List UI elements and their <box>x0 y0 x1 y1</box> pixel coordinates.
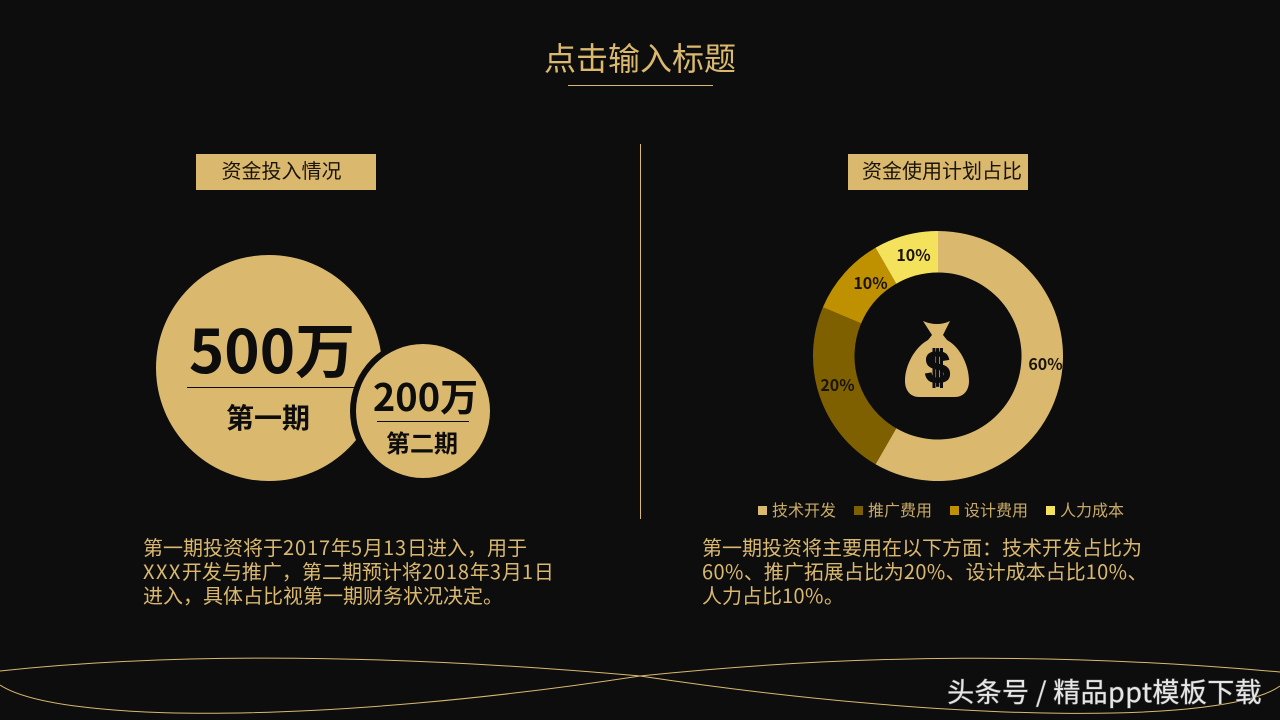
data labels: 20% <box>820 372 855 396</box>
text block: funding description: 进入，具体占比视第一期财务状况决定。 <box>143 580 503 609</box>
text block: usage description: 60%、推广拓展占比为20%、设计成本占比10%、 <box>702 556 1147 585</box>
segment: 10% labour <box>876 231 938 284</box>
centre divider <box>640 144 641 519</box>
chart legend: 设计费用 <box>964 497 1028 521</box>
circle: phase one: 500万 <box>189 304 355 391</box>
icon: money bag: $ <box>925 341 950 393</box>
text block: funding description: 第一期投资将于2017年5月13日进入，用于 <box>143 532 527 561</box>
data labels: 60% <box>1028 351 1063 375</box>
chart legend: 人力成本 <box>1060 497 1124 521</box>
heading: funding input <box>196 154 376 190</box>
circle: phase two: 第二期 <box>386 424 458 459</box>
icon: money bag <box>905 321 969 397</box>
heading: funding use: 资金使用计划占比 <box>862 155 1022 184</box>
circle: phase one <box>156 255 382 481</box>
chart legend: 技术开发 <box>772 497 836 521</box>
text block: usage description <box>702 532 1147 609</box>
donut chart <box>813 231 1063 481</box>
text block: usage description: 第一期投资将主要用在以下方面：技术开发占比为 <box>702 532 1142 561</box>
decorative curves <box>0 658 1280 713</box>
segment: 10% design <box>823 248 896 323</box>
segment: 20% promotion <box>813 307 896 464</box>
data labels: 10% <box>896 242 931 266</box>
text block: usage description: 人力占比10%。 <box>702 580 844 609</box>
data labels <box>820 242 1063 396</box>
chart legend <box>758 497 1124 521</box>
circle: phase two: 200万 <box>373 367 478 422</box>
heading: funding input: 资金投入情况 <box>222 155 342 184</box>
text block: funding description: XXX开发与推广，第二期预计将2018年3月1日 <box>143 556 554 585</box>
text block: funding description <box>143 532 554 609</box>
circle: phase one: 第一期 <box>226 397 310 437</box>
circle: phase two <box>350 338 496 484</box>
data labels: 10% <box>853 270 888 294</box>
chart legend: 推广费用 <box>868 497 932 521</box>
segment: 60% technology <box>876 231 1063 481</box>
watermark: 头条号 / 精品ppt模板下载 <box>947 671 1262 710</box>
title: 点击输入标题 <box>544 34 736 80</box>
